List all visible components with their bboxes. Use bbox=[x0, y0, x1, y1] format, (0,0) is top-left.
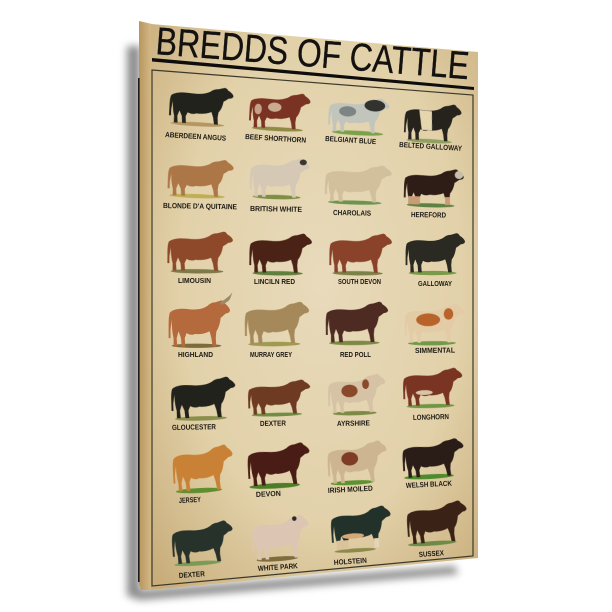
icon: devon bbox=[247, 442, 311, 490]
icon: dexter bbox=[248, 379, 311, 417]
icon: british white bbox=[249, 157, 310, 200]
breed: holstein bbox=[330, 505, 393, 567]
breed: sussex bbox=[405, 500, 469, 559]
label: belgiant blue: BELGIANT BLUE bbox=[325, 134, 376, 146]
icon: irish moiled bbox=[327, 440, 388, 486]
breed: galloway bbox=[406, 233, 465, 288]
icon: south devon bbox=[329, 233, 392, 276]
label: irish moiled: IRISH MOILED bbox=[328, 484, 374, 495]
icon: ayrshire bbox=[328, 374, 386, 416]
label: highland: HIGHLAND bbox=[178, 350, 214, 359]
label: hereford: HEREFORD bbox=[411, 210, 447, 220]
label: blonde d'a quitaine: BLONDE D'A QUITAINE bbox=[163, 201, 237, 211]
label: charolais: CHAROLAIS bbox=[333, 208, 371, 218]
canvas shadow bbox=[127, 46, 458, 600]
label: jersey: JERSEY bbox=[179, 495, 201, 505]
label: simmental: SIMMENTAL bbox=[415, 346, 455, 355]
breed: blonde d'a quitaine bbox=[163, 158, 237, 211]
icon: gloucester bbox=[171, 377, 236, 421]
icon: blonde d'a quitaine bbox=[167, 158, 234, 199]
icon: lincoln red bbox=[249, 233, 312, 276]
breed: lincoln red bbox=[249, 233, 312, 286]
breed: red poll bbox=[326, 302, 388, 359]
label: belted galloway: BELTED GALLOWAY bbox=[399, 140, 462, 153]
icon: white park bbox=[251, 514, 311, 563]
breed: limousin bbox=[167, 231, 233, 285]
label: ayrshire: AYRSHIRE bbox=[337, 418, 370, 428]
icon: dexter bbox=[171, 520, 235, 567]
icon: murray grey bbox=[245, 302, 309, 347]
label: welsh black: WELSH BLACK bbox=[406, 479, 453, 490]
breed: hereford bbox=[404, 168, 464, 220]
icon: holstein bbox=[330, 505, 393, 554]
icon: sussex bbox=[405, 500, 469, 547]
icon: beef shorthorn bbox=[249, 91, 311, 133]
label: red poll: RED POLL bbox=[340, 350, 371, 359]
icon: charolais bbox=[325, 164, 392, 206]
label: lincoln red: LINCILN RED bbox=[254, 277, 296, 286]
breed: longhorn bbox=[403, 368, 463, 422]
label: dexter: DEXTER bbox=[179, 569, 206, 580]
label: gloucester: GLOUCESTER bbox=[172, 422, 217, 432]
breed: dexter (row 7) bbox=[171, 520, 235, 580]
label: holstein: HOLSTEIN bbox=[334, 556, 367, 567]
label: beef shorthorn: BEEF SHORTHORN bbox=[245, 132, 306, 145]
icon: welsh black bbox=[402, 438, 465, 480]
label: galloway: GALLOWAY bbox=[418, 279, 452, 288]
breed: devon bbox=[247, 442, 311, 499]
breed: white park bbox=[251, 514, 311, 573]
label: south devon: SOUTH DEVON bbox=[338, 277, 381, 286]
breed: beef shorthorn bbox=[245, 91, 311, 145]
breed: british white bbox=[249, 157, 310, 214]
breed: south devon bbox=[329, 233, 392, 286]
label: white park: WHITE PARK bbox=[258, 561, 299, 573]
label: devon: DEVON bbox=[256, 489, 281, 499]
label: murray grey: MURRAY GREY bbox=[250, 350, 292, 359]
breed: aberdeen angus bbox=[165, 85, 234, 143]
breed: dexter (row 5) bbox=[248, 379, 311, 428]
breed: welsh black bbox=[402, 438, 465, 490]
icon: longhorn bbox=[403, 368, 463, 409]
inner frame bbox=[152, 70, 473, 586]
breed: jersey bbox=[172, 444, 234, 505]
spine edge line bbox=[138, 78, 140, 582]
title rule bbox=[152, 58, 474, 90]
breed: irish moiled bbox=[327, 440, 388, 495]
icon: jersey bbox=[172, 444, 234, 494]
icon: galloway bbox=[406, 233, 465, 275]
canvas spine bbox=[139, 21, 152, 590]
breed: murray grey bbox=[245, 302, 309, 359]
icon: simmental bbox=[405, 304, 464, 346]
label: limousin: LIMOUSIN bbox=[178, 276, 211, 285]
label: dexter: DEXTER bbox=[260, 419, 287, 428]
icon: hereford bbox=[404, 168, 464, 208]
breed: charolais bbox=[325, 164, 392, 218]
icon: belgiant blue bbox=[328, 96, 390, 137]
label: longhorn: LONGHORN bbox=[413, 412, 449, 422]
icon: red poll bbox=[326, 302, 388, 345]
breed: simmental bbox=[405, 304, 464, 355]
breed: belted galloway bbox=[399, 102, 462, 153]
title: BREDDS OF CATTLE bbox=[154, 20, 471, 88]
icon: highland bbox=[169, 292, 232, 348]
label: sussex: SUSSEX bbox=[419, 548, 444, 559]
breed: ayrshire bbox=[328, 374, 386, 428]
icon: belted galloway bbox=[403, 102, 462, 145]
breed: highland bbox=[169, 292, 232, 359]
label: aberdeen angus: ABERDEEN ANGUS bbox=[165, 130, 226, 143]
icon: limousin bbox=[167, 231, 233, 274]
breed: belgiant blue bbox=[325, 96, 390, 146]
icon: aberdeen angus bbox=[169, 85, 234, 128]
poster sheet bbox=[151, 24, 478, 590]
breed: gloucester bbox=[171, 377, 236, 432]
label: british white: BRITISH WHITE bbox=[250, 204, 302, 214]
